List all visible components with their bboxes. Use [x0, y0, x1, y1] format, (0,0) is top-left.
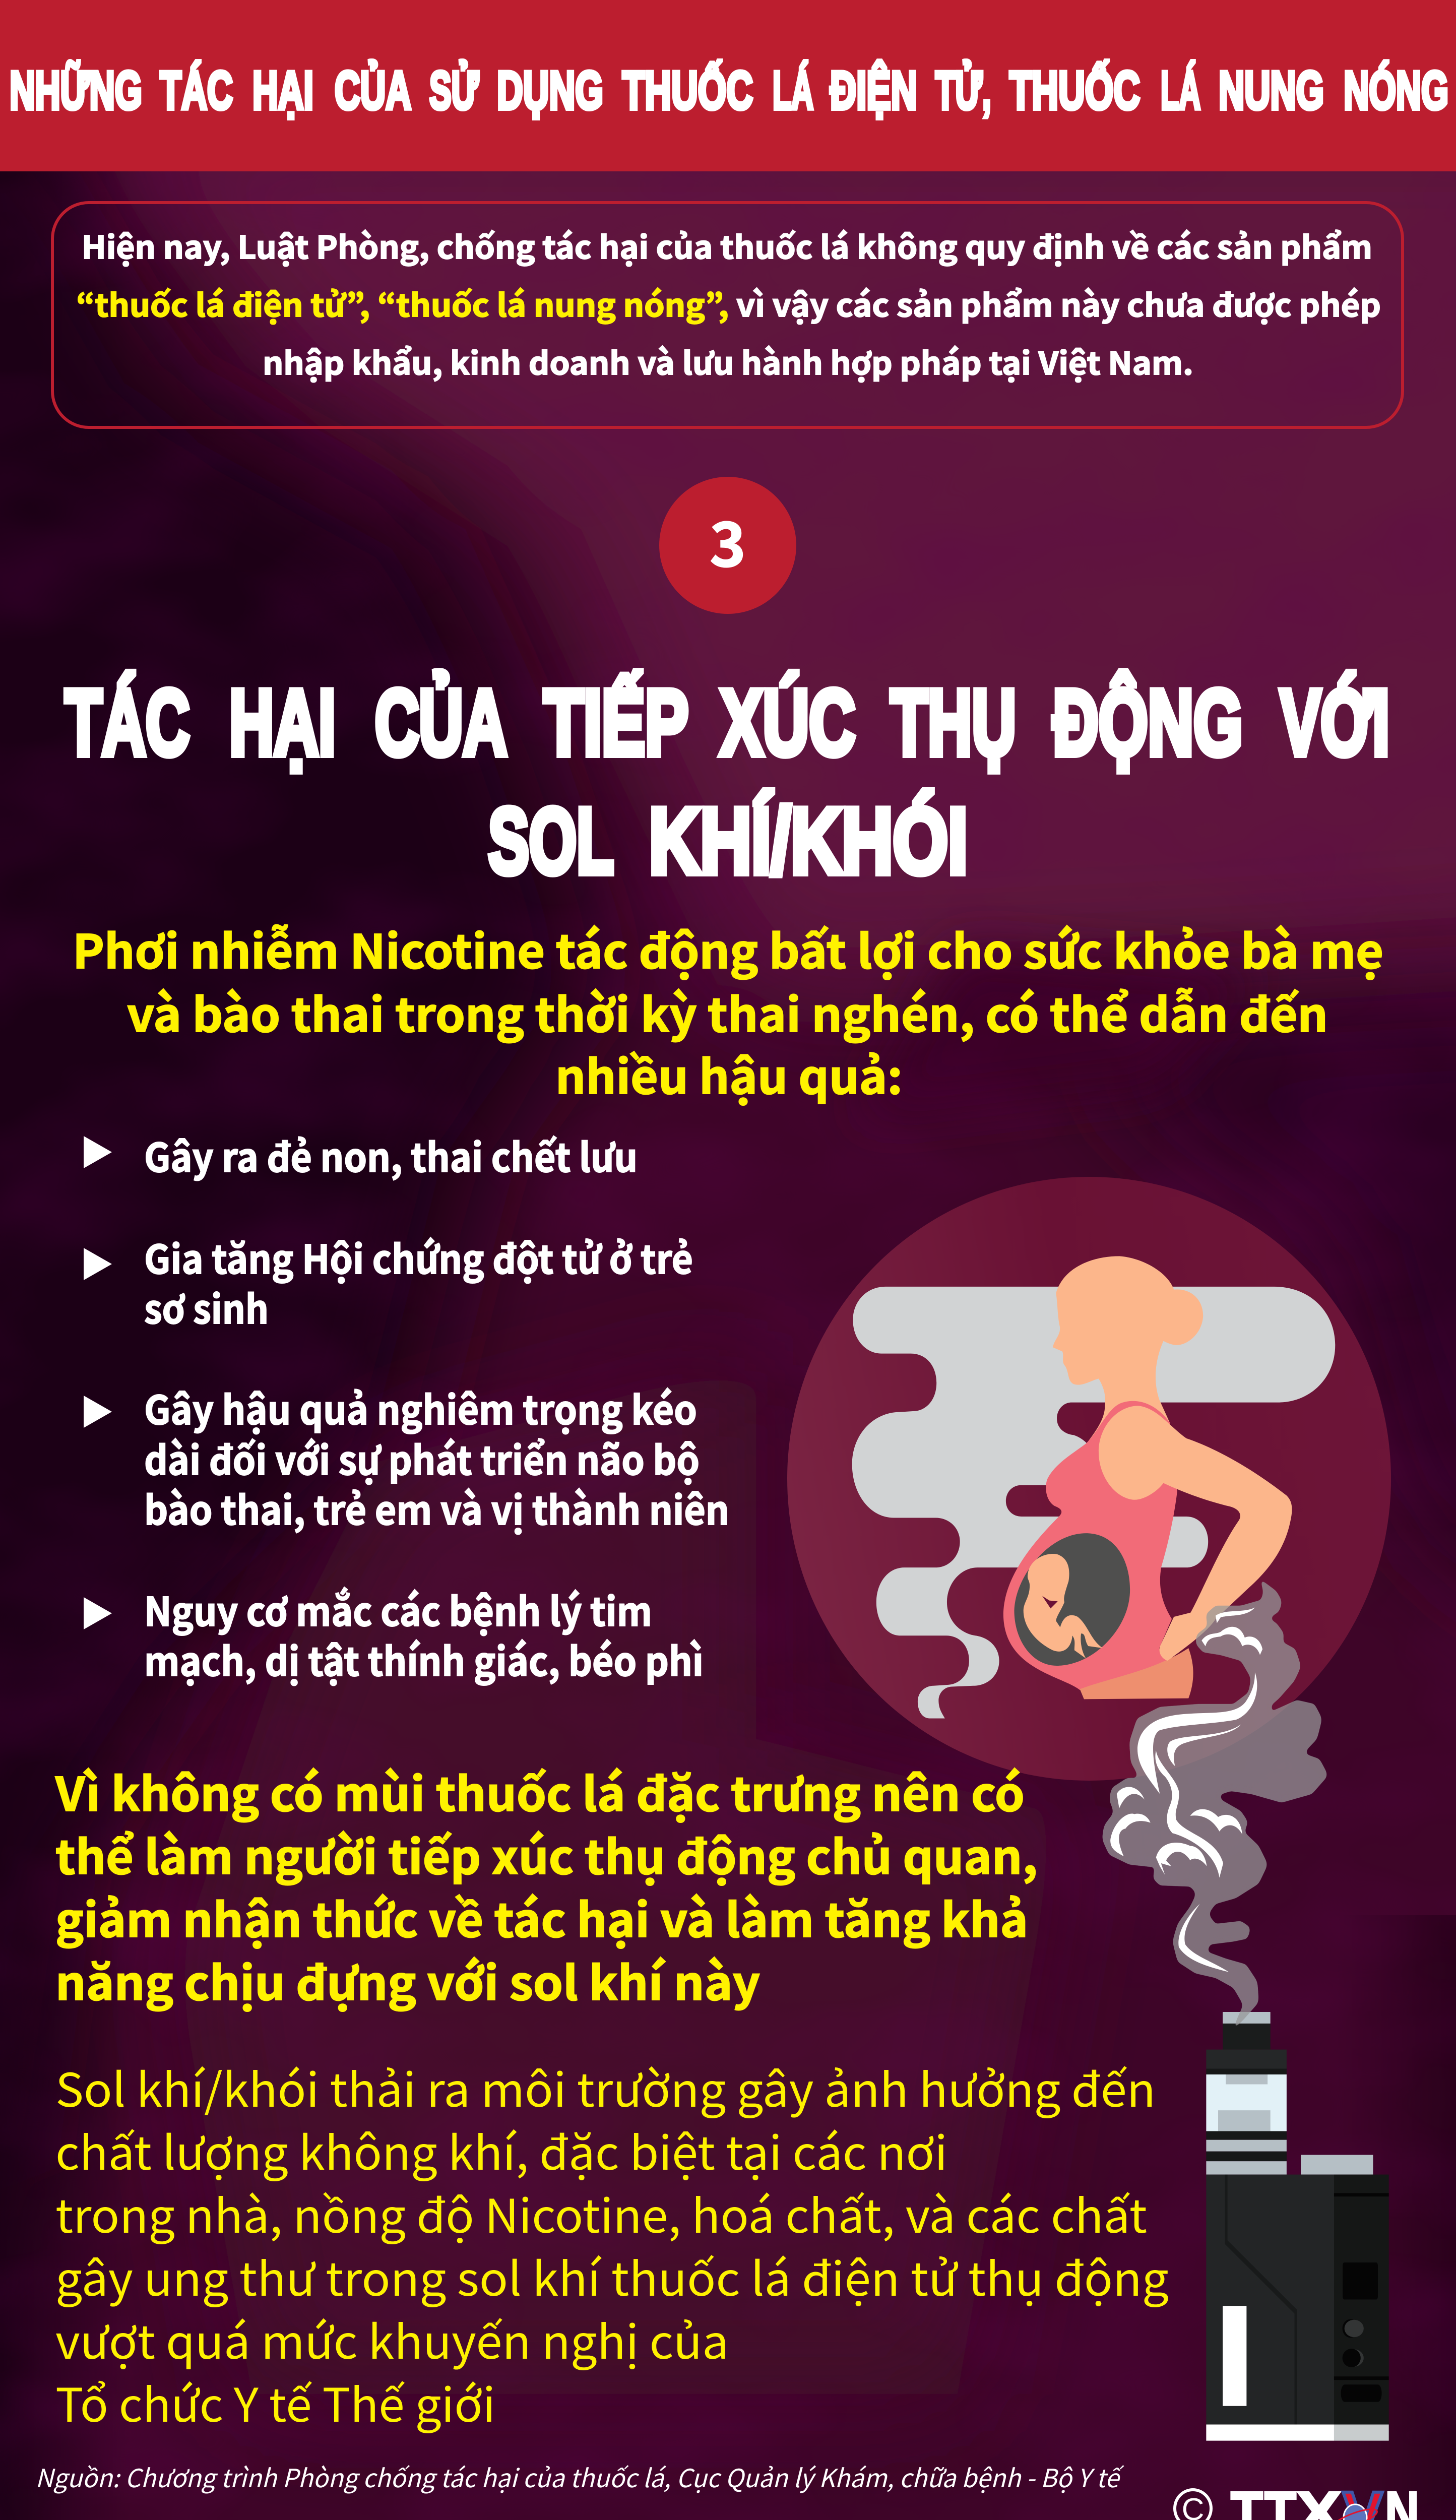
yellow bold paragraph: giảm nhận thức về tác hại và làm tăng khả — [55, 1883, 1028, 1950]
bullet 4: Nguy cơ mắc các bệnh lý tim — [144, 1581, 652, 1637]
bullet 3 — [84, 1379, 729, 1536]
yellow subheading: và bào thai trong thời kỳ thai nghén, có thể dẫn đến — [127, 978, 1328, 1045]
bullet list — [84, 1127, 729, 1687]
logo globe — [1332, 2504, 1379, 2520]
vape smoke plume — [1102, 1578, 1328, 2032]
woman dress — [1003, 1401, 1177, 1690]
bullet 3: Gây hậu quả nghiêm trọng kéo — [144, 1379, 697, 1436]
bullet 2 — [84, 1229, 693, 1335]
yellow regular paragraph: chất lượng không khí, đặc biệt tại các nơi — [55, 2116, 947, 2183]
bullet 3: bào thai, trẻ em và vị thành niên — [144, 1480, 729, 1536]
yellow regular paragraph: vượt quá mức khuyến nghị của — [55, 2305, 729, 2372]
bullet 1: Gây ra đẻ non, thai chết lưu — [144, 1127, 638, 1183]
header title: LÁ — [773, 60, 813, 120]
yellow bold paragraph: thể làm người tiếp xúc thụ động chủ quan, — [55, 1820, 1038, 1887]
section heading: CỦA — [375, 670, 507, 774]
section heading: TÁC — [65, 670, 189, 774]
woman head and neck — [1053, 1256, 1203, 1447]
fetus — [1024, 1554, 1103, 1659]
header banner — [0, 0, 1456, 171]
bullet 3: dài đối với sự phát triển não bộ — [144, 1430, 700, 1486]
bullet 4: mạch, dị tật thính giác, béo phì — [144, 1631, 704, 1687]
header title: THUỐC — [622, 60, 753, 120]
intro text: Hiện nay, Luật Phòng, chống tác hại của thuốc lá không quy định về các sản phẩm — [82, 222, 1372, 268]
womb — [1014, 1533, 1130, 1666]
yellow regular paragraph: Sol khí/khói thải ra môi trường gây ảnh hưởng đến — [55, 2053, 1156, 2120]
header title: THUỐC — [1009, 60, 1140, 120]
section heading: SOL — [488, 789, 614, 893]
bullet 2: Gia tăng Hội chứng đột tử ở trẻ — [144, 1229, 693, 1285]
section heading: TIẾP — [544, 670, 688, 774]
woman arm — [1099, 1406, 1292, 1661]
section heading — [65, 670, 1389, 893]
vape device — [1206, 2012, 1389, 2441]
yellow regular paragraph: gây ung thư trong sol khí thuốc lá điện tử thụ động — [55, 2242, 1169, 2309]
section heading: THỤ — [891, 670, 1016, 774]
header title: NUNG — [1219, 60, 1324, 120]
yellow subheading: nhiều hậu quả: — [555, 1040, 903, 1107]
intro text — [76, 222, 1381, 384]
header title: TÁC — [160, 60, 233, 120]
yellow regular paragraph: Tổ chức Y tế Thế giới — [55, 2368, 495, 2435]
header title: TỬ, — [935, 60, 991, 120]
copyright symbol — [1175, 2490, 1211, 2520]
header title — [10, 60, 1448, 120]
smoke highlights — [1110, 1608, 1262, 1972]
yellow bold paragraph: năng chịu đựng với sol khí này — [55, 1946, 760, 2013]
smoke cloud — [852, 1287, 1335, 1718]
yellow subheading: Phơi nhiễm Nicotine tác động bất lợi cho sức khỏe bà mẹ — [73, 915, 1383, 982]
header title: ĐIỆN — [830, 60, 917, 120]
yellow subheading — [73, 915, 1383, 1107]
illustration circle backdrop — [787, 1177, 1391, 1781]
section heading: XÚC — [720, 670, 855, 774]
header title: LÁ — [1161, 60, 1200, 120]
source line: Nguồn: Chương trình Phòng chống tác hại của thuốc lá, Cục Quản lý Khám, chữa bệnh - Bộ Y tế — [35, 2459, 1124, 2495]
yellow bold paragraph — [55, 1757, 1038, 2013]
section heading: ĐỘNG — [1053, 670, 1243, 774]
section heading: HẠI — [229, 670, 336, 774]
header title: DỤNG — [497, 60, 603, 120]
header title: NHỮNG — [10, 60, 142, 120]
panel: intro notice box — [52, 203, 1403, 427]
logo letters — [1231, 2480, 1419, 2520]
number badge 3: 3 — [710, 495, 746, 585]
section heading: VỚI — [1280, 670, 1389, 774]
number badge 3 — [659, 477, 796, 614]
header title: HẠI — [252, 60, 313, 120]
yellow regular paragraph: trong nhà, nồng độ Nicotine, hoá chất, và các chất — [55, 2179, 1147, 2246]
yellow bold paragraph: Vì không có mùi thuốc lá đặc trưng nên có — [55, 1757, 1025, 1824]
bullet 2: sơ sinh — [144, 1279, 269, 1335]
illustration: pregnant woman with smoke cloud — [852, 1256, 1335, 1718]
bullet 4 — [84, 1581, 704, 1687]
section heading: KHÍ/KHÓI — [649, 789, 968, 893]
woman lower body — [1080, 1648, 1193, 1699]
intro text: “thuốc lá điện tử”, “thuốc lá nung nóng”, vì vậy các sản phẩm này chưa được phép — [76, 280, 1381, 326]
yellow regular paragraph — [55, 2053, 1169, 2435]
header title: CỦA — [335, 60, 411, 120]
header title: SỬ — [429, 60, 479, 120]
intro text: nhập khẩu, kinh doanh và lưu hành hợp pháp tại Việt Nam. — [263, 338, 1193, 384]
copyright mark and agency logo — [1175, 2480, 1421, 2520]
